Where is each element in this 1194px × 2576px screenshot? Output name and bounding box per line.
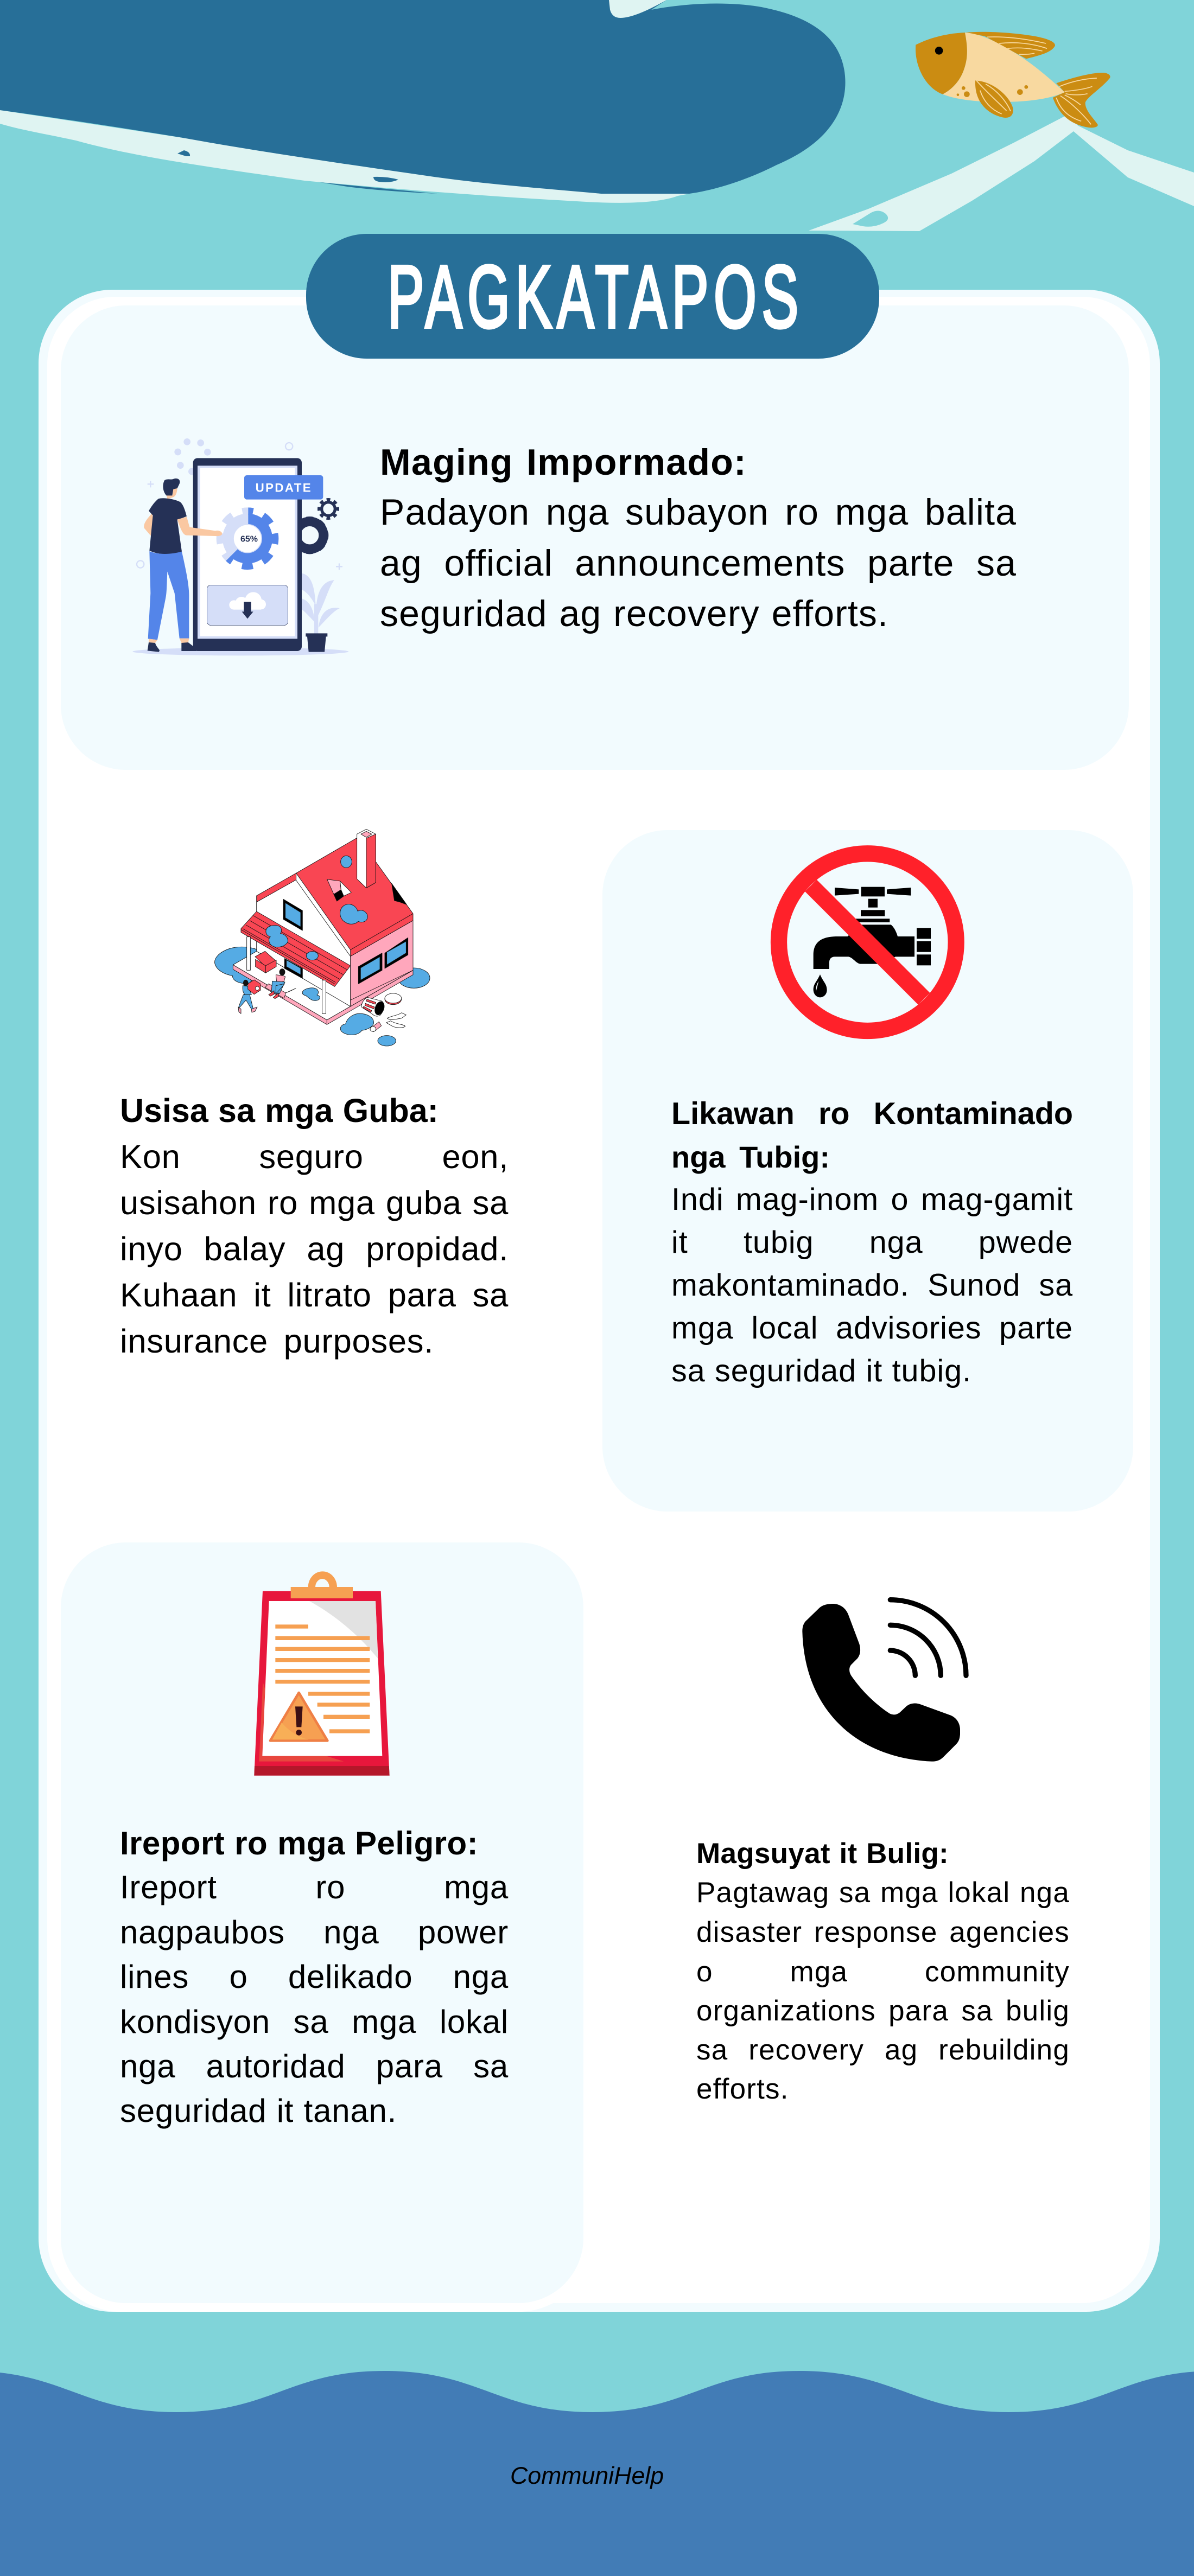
text block: magsuyat it bulig: efforts. — [696, 2073, 789, 2105]
text block: ireport ro mga peligro: Ireport ro mga Peligro: — [120, 1825, 478, 1861]
icon: no water tap — [779, 853, 956, 1031]
panel: ireport — [61, 1542, 583, 2303]
text block: magsuyat it bulig: organizations para sa bulig — [696, 1995, 1070, 2027]
text block: ireport ro mga peligro: nga autoridad para sa — [120, 2048, 509, 2084]
icon: software update illustration — [132, 438, 348, 655]
footer credit: CommuniHelp — [510, 2463, 664, 2489]
whale belly stripe — [0, 110, 689, 203]
panel: outer card — [39, 290, 1160, 2312]
text block: maging impormado — [380, 442, 1017, 634]
text block: likawan ro kontaminado nga tubig: sa seguridad it tubig. — [671, 1354, 971, 1388]
text block: ireport ro mga peligro: kondisyon sa mga lokal — [120, 2004, 509, 2040]
text block: ireport ro mga peligro — [120, 1825, 509, 2129]
icon: phone call — [802, 1600, 966, 1762]
text block: usisa sa mga guba — [120, 1092, 509, 1360]
icon: software update illustration: UPDATE — [256, 481, 311, 495]
text block: magsuyat it bulig — [696, 1838, 1070, 2105]
text block: likawan ro kontaminado nga tubig: mga local advisories parte — [671, 1311, 1073, 1346]
text block: ireport ro mga peligro: lines o delikado nga — [120, 1959, 509, 1995]
text block: usisa sa mga guba: Usisa sa mga Guba: — [120, 1092, 439, 1129]
text block: usisa sa mga guba: usisahon ro mga guba sa — [120, 1184, 509, 1222]
text block: usisa sa mga guba: insurance purposes. — [120, 1323, 434, 1360]
panel: maging impormado — [61, 305, 1129, 770]
text block: magsuyat it bulig: sa recovery ag rebuilding — [696, 2034, 1070, 2066]
icon: damaged flooded house — [215, 829, 430, 1046]
whale body — [0, 0, 845, 194]
text block: likawan ro kontaminado nga tubig: nga Tubig: — [671, 1140, 830, 1174]
icon: software update illustration: 65% — [240, 535, 258, 544]
text block: ireport ro mga peligro: Ireport ro mga — [120, 1869, 509, 1905]
text block: likawan ro kontaminado nga tubig: makontaminado. Sunod sa — [671, 1268, 1073, 1303]
title pill — [306, 234, 879, 359]
text block: usisa sa mga guba: inyo balay ag propidad. — [120, 1230, 509, 1268]
text block: ireport ro mga peligro: seguridad it tanan. — [120, 2093, 397, 2129]
text block: maging impormado: ag official announcements parte sa — [380, 543, 1017, 584]
text block: ireport ro mga peligro: nagpaubos nga power — [120, 1914, 509, 1950]
text block: maging impormado: Maging Impormado: — [380, 442, 747, 483]
water stripes at the tail — [809, 116, 1194, 231]
text block: likawan ro kontaminado nga tubig: Likawan ro Kontaminado — [671, 1096, 1073, 1131]
icon: fish — [916, 32, 1110, 127]
text block: maging impormado: Padayon nga subayon ro mga balita — [380, 492, 1017, 533]
text block: magsuyat it bulig: Magsuyat it Bulig: — [696, 1838, 949, 1870]
text block: usisa sa mga guba: Kon seguro eon, — [120, 1138, 509, 1176]
text block: likawan ro kontaminado nga tubig: Indi mag-inom o mag-gamit — [671, 1182, 1073, 1217]
icon: hazard report clipboard — [254, 1571, 390, 1776]
text block: magsuyat it bulig: disaster response agencies — [696, 1916, 1070, 1948]
title: PAGKATAPOS — [388, 247, 798, 346]
text block: likawan ro kontaminado nga tubig: it tubig nga pwede — [671, 1225, 1073, 1260]
text block: maging impormado: seguridad ag recovery efforts. — [380, 593, 888, 634]
text block: magsuyat it bulig: Pagtawag sa mga lokal nga — [696, 1877, 1070, 1909]
text block: magsuyat it bulig: o mga community — [696, 1956, 1070, 1988]
text block: usisa sa mga guba: Kuhaan it litrato para sa — [120, 1277, 509, 1314]
text block: likawan ro kontaminado nga tubig — [671, 1096, 1073, 1388]
panel: likawan — [602, 830, 1133, 1512]
bottom wave — [0, 2371, 1194, 2576]
